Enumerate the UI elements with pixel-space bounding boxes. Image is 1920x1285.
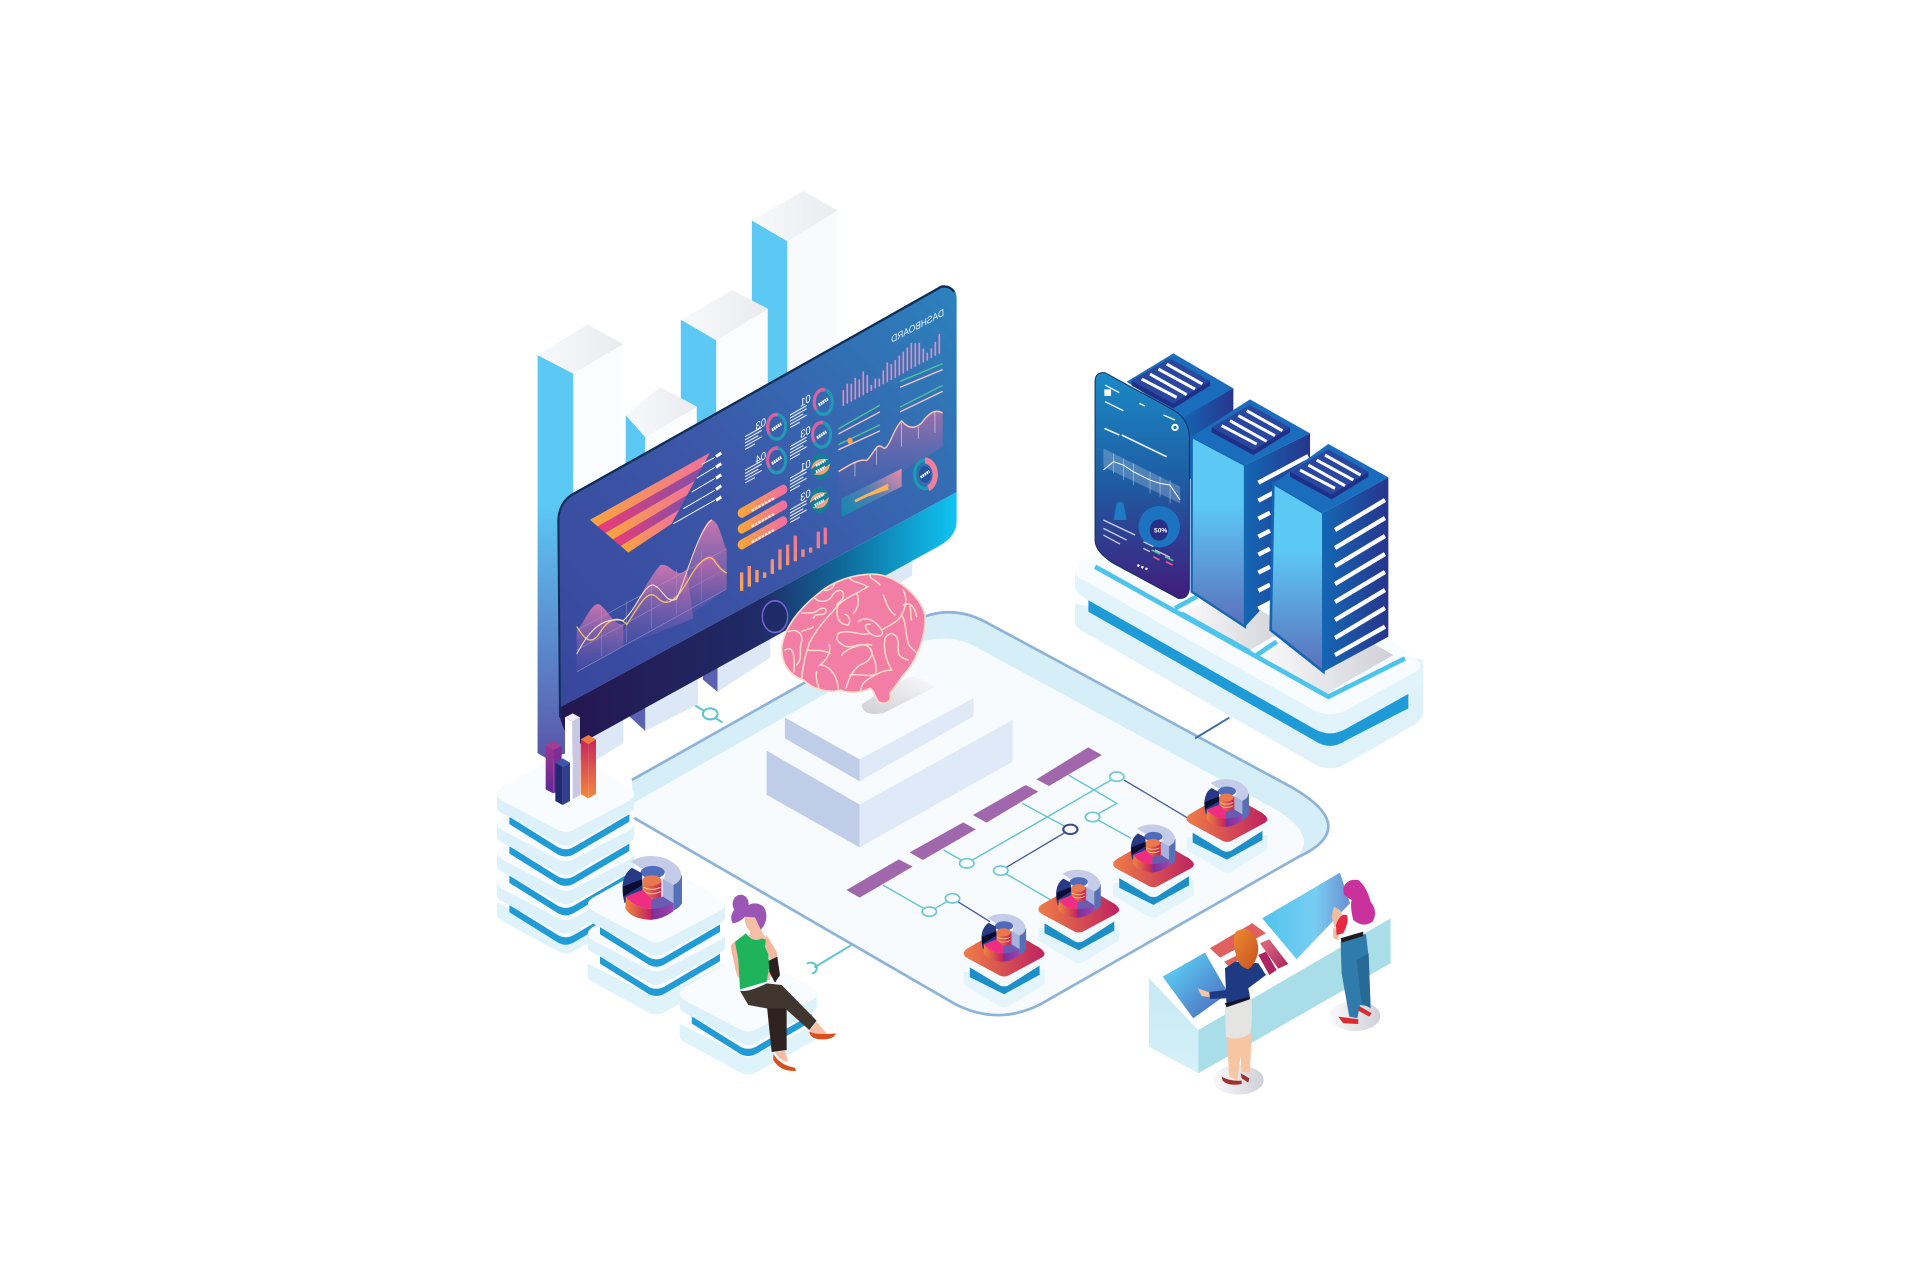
brain folds xyxy=(785,575,917,692)
right arm xyxy=(765,935,780,977)
dashboard screen xyxy=(558,286,957,744)
red sleeve xyxy=(1336,915,1348,935)
slider lines xyxy=(838,364,943,450)
purple data bars xyxy=(846,747,1102,898)
shoes xyxy=(1338,1006,1372,1024)
kiosk top xyxy=(1149,869,1391,1030)
purple bars and circuit lines xyxy=(846,747,1188,922)
column 4 xyxy=(752,191,838,404)
kiosk bar graphic xyxy=(1210,923,1288,975)
ring donuts xyxy=(745,390,832,523)
screen dark top edge xyxy=(558,286,954,717)
orange-red bar xyxy=(581,735,596,798)
connector nodes around platform xyxy=(693,704,851,973)
top face xyxy=(1075,500,1420,714)
ring donuts: 01 xyxy=(800,392,811,410)
left arm xyxy=(731,942,770,982)
pale column bases under screen xyxy=(573,545,912,774)
circuit nodes xyxy=(922,772,1124,916)
forearm xyxy=(1332,907,1343,940)
lower block xyxy=(767,720,1013,847)
phone line chart xyxy=(1103,448,1180,503)
kiosk with two women xyxy=(1149,869,1391,1095)
hair xyxy=(1343,880,1375,925)
seated woman xyxy=(731,895,836,1071)
hand xyxy=(1198,988,1210,997)
shirt xyxy=(1341,910,1363,942)
server 2 xyxy=(1192,399,1310,627)
server platform xyxy=(1075,500,1423,768)
woman 2 xyxy=(1332,880,1375,1024)
upper block xyxy=(785,661,973,781)
blue stripe xyxy=(1088,598,1408,746)
column 3 xyxy=(681,290,768,441)
phone header text xyxy=(1104,385,1175,457)
navy bar xyxy=(555,758,570,805)
hair xyxy=(1234,929,1258,969)
skirt xyxy=(1225,998,1252,1038)
lower bar chart xyxy=(742,528,825,591)
phone figure icon xyxy=(1113,502,1127,520)
mini card chart xyxy=(842,469,902,517)
large pie cylinder xyxy=(623,856,682,920)
data tiles with pie cylinders xyxy=(964,779,1267,1007)
brain shadow xyxy=(862,677,934,714)
phone donut xyxy=(1139,506,1180,547)
hair xyxy=(731,895,766,930)
brain xyxy=(782,574,934,714)
mirrored dashboard title: DASHBOARD xyxy=(891,307,944,346)
middle stack xyxy=(588,864,725,1014)
phone page dots xyxy=(1137,565,1147,569)
3D bar columns behind screen xyxy=(538,191,838,774)
ring donuts: 04 xyxy=(756,449,766,467)
pill bars xyxy=(742,489,783,545)
kiosk right screen xyxy=(1262,873,1350,959)
green top xyxy=(735,933,769,989)
circuit lines xyxy=(883,775,1188,922)
lilac bar xyxy=(565,713,580,799)
brain shape xyxy=(782,574,925,703)
phone xyxy=(769,957,780,983)
pedestal xyxy=(767,661,1013,847)
server towers xyxy=(1095,353,1388,672)
kiosk front xyxy=(1198,918,1391,1073)
phone donut: 50% xyxy=(1154,528,1167,535)
face and neck xyxy=(744,917,767,940)
woman 1 xyxy=(1198,929,1266,1085)
purple bar xyxy=(546,741,562,793)
jeans xyxy=(1341,934,1371,1018)
woman 2 floor disc xyxy=(1330,1001,1380,1031)
kiosk left screen xyxy=(1163,953,1228,1018)
column 1 xyxy=(538,324,623,774)
area chart xyxy=(577,520,727,672)
shoes xyxy=(1222,1073,1249,1085)
phone xyxy=(1095,373,1189,598)
upper lip xyxy=(1075,573,1423,733)
upper right bar chart xyxy=(843,334,939,406)
small 3D bars on stack xyxy=(546,713,596,805)
funnel chart xyxy=(590,453,721,553)
ring donuts: 01 xyxy=(800,457,811,475)
ring donuts: 03 xyxy=(800,424,811,442)
ring donuts: 03 xyxy=(756,416,766,434)
belt xyxy=(1225,997,1250,1007)
big donut xyxy=(915,460,935,489)
top xyxy=(1225,962,1266,1007)
central platform xyxy=(632,612,1328,1015)
home button ring xyxy=(762,601,788,632)
lower leg back xyxy=(767,1002,787,1052)
legs xyxy=(1227,1033,1252,1080)
screen lower bezel xyxy=(560,492,957,744)
front stack xyxy=(680,953,817,1074)
ring donuts: 03 xyxy=(800,487,811,505)
server 3 xyxy=(1271,444,1388,672)
phone text rows xyxy=(1103,520,1170,557)
server 1 xyxy=(1127,353,1233,480)
trousers xyxy=(740,983,817,1030)
connector to servers xyxy=(1195,718,1229,738)
server bay frame xyxy=(1095,567,1405,697)
left server stack xyxy=(497,754,634,953)
screen panel xyxy=(558,286,957,708)
lower lip xyxy=(1075,603,1423,768)
column 2 xyxy=(626,387,697,490)
phone gear icon xyxy=(1172,425,1178,430)
woman 1 floor disc xyxy=(1213,1065,1264,1095)
feet xyxy=(773,1054,796,1071)
line chart xyxy=(839,411,943,510)
belt xyxy=(1341,932,1363,943)
arm xyxy=(1209,990,1228,999)
kiosk side xyxy=(1149,978,1198,1073)
